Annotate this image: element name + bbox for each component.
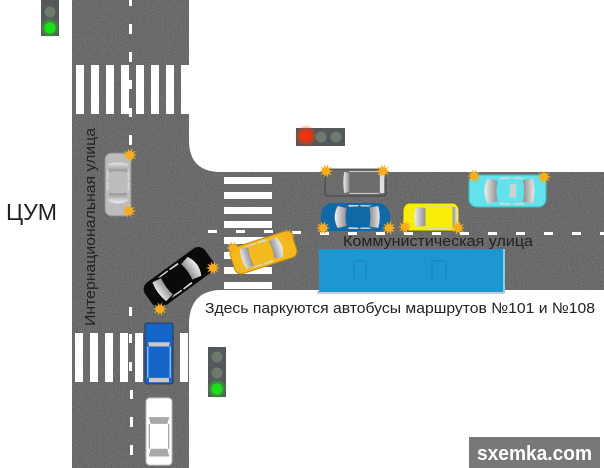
label: ЦУМ: ЦУМ: [6, 199, 57, 225]
silver car: [105, 153, 131, 216]
right crosswalk: [224, 177, 272, 289]
label: bus parking note: Здесь паркуются автобусы маршрутов №101 и №108: [205, 300, 595, 317]
watermark logo: sxemka.com: [477, 442, 592, 465]
traffic light: top left, green: [41, 0, 59, 36]
watermark logo: [469, 437, 600, 468]
orange car: [228, 229, 299, 276]
traffic light: lower, green: [208, 347, 226, 397]
white car: [146, 398, 172, 465]
black car: [140, 244, 218, 311]
yellow car: [403, 203, 459, 231]
label: Коммунистическая улица: Коммунистическая улица: [343, 234, 534, 250]
grey car: [325, 169, 386, 196]
teal car: [469, 175, 546, 207]
traffic light: horizontal, red: [296, 127, 345, 146]
hazard light stars: [123, 149, 550, 315]
horizontal lane dashes: [208, 230, 604, 235]
bottom crosswalk: [75, 333, 188, 382]
dark blue car: [321, 203, 390, 231]
blue car, lower: [145, 323, 173, 384]
bus: [317, 249, 505, 294]
vertical lane dashes: [129, 0, 133, 455]
label: Интернациональная улица: Интернациональная улица: [83, 127, 99, 326]
top crosswalk: [76, 65, 189, 114]
